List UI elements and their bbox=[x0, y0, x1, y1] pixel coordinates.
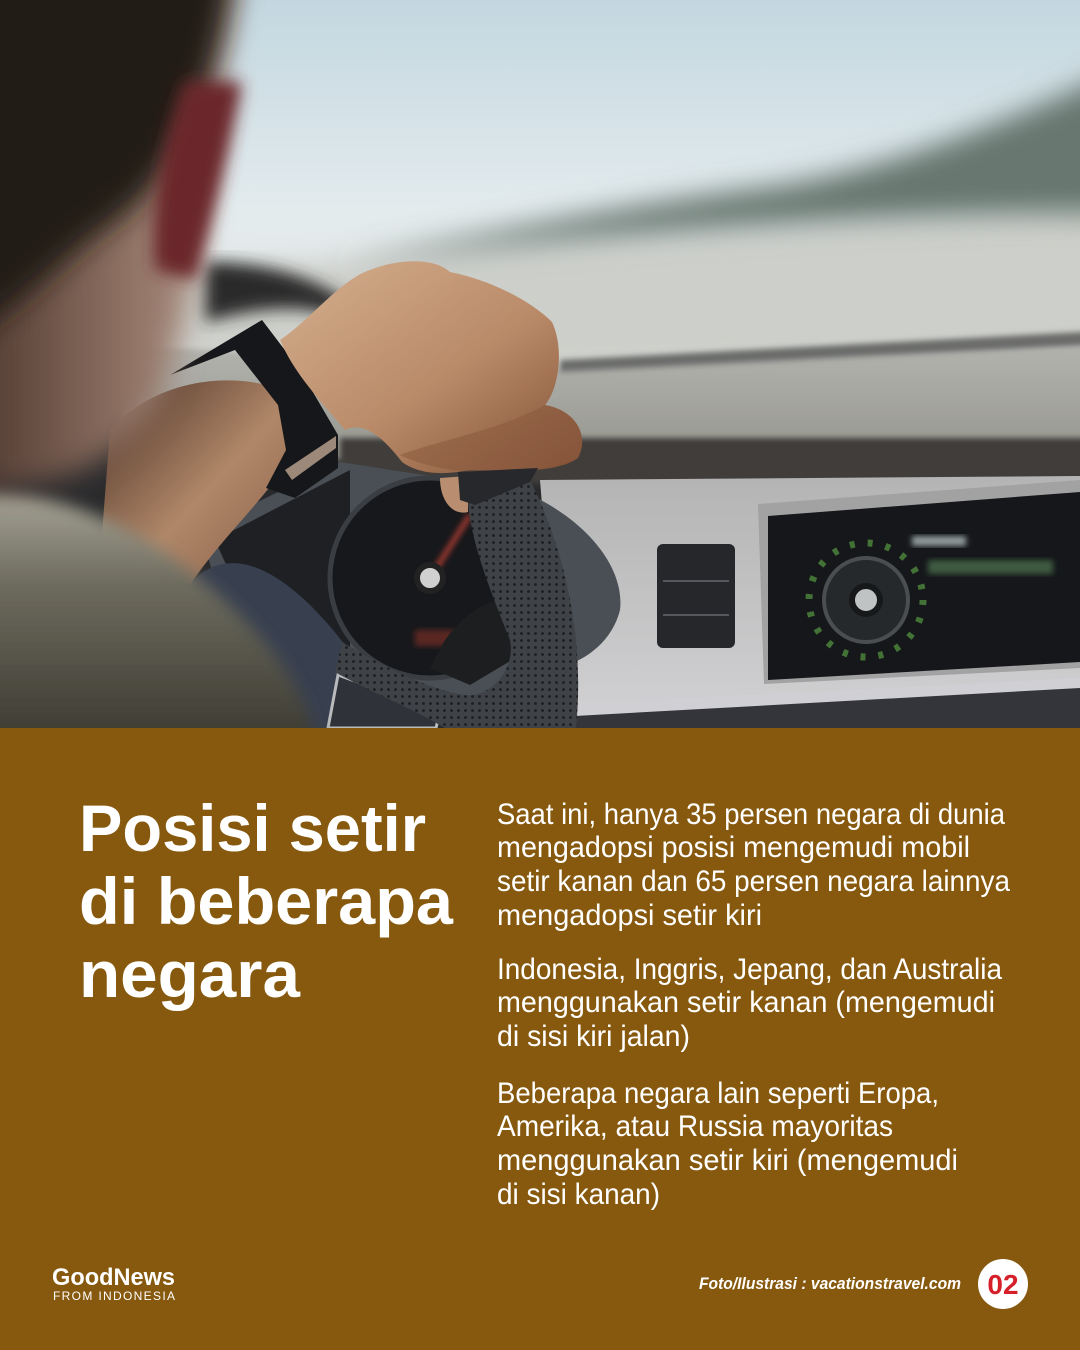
page number badge bbox=[978, 1259, 1028, 1309]
driver head bbox=[0, 0, 240, 490]
centre console bbox=[540, 476, 1080, 728]
steering wheel rim top bbox=[205, 262, 345, 322]
text block: left-hand drive countries: menggunakan setir kiri (mengemudi bbox=[497, 1144, 958, 1177]
hand on wheel bbox=[280, 261, 582, 473]
infotainment screen bbox=[758, 480, 1080, 684]
logo: GoodNews from Indonesia bbox=[52, 1264, 175, 1303]
thumb bbox=[440, 476, 468, 513]
dashboard hood band bbox=[338, 434, 1080, 484]
button panel bbox=[657, 544, 735, 648]
text block: right-hand drive countries: Indonesia, Inggris, Jepang, dan Australia bbox=[497, 953, 1002, 986]
title: di beberapa bbox=[79, 864, 454, 938]
shirt shoulder bbox=[0, 484, 318, 728]
text block: right-hand drive countries bbox=[497, 953, 1002, 1053]
steering wheel perforated rim bbox=[335, 480, 578, 728]
text block: left-hand drive countries: Amerika, atau Russia mayoritas bbox=[497, 1110, 893, 1143]
text block: right-hand drive countries: di sisi kiri jalan) bbox=[497, 1020, 690, 1053]
text block: left-hand drive countries: Beberapa negara lain seperti Eropa, bbox=[497, 1077, 939, 1110]
control buttons bbox=[328, 675, 440, 728]
text block: global share: mengadopsi setir kiri bbox=[497, 899, 762, 932]
text block: left-hand drive countries: di sisi kanan) bbox=[497, 1178, 660, 1211]
sky bbox=[166, 0, 1080, 371]
text block: global share: Saat ini, hanya 35 persen negara di dunia bbox=[497, 798, 1005, 831]
text block: left-hand drive countries bbox=[497, 1077, 958, 1211]
title bbox=[79, 791, 454, 1011]
speedometer dial bbox=[328, 476, 495, 680]
blurred road bbox=[150, 205, 1080, 375]
text block: global share: mengadopsi posisi mengemudi mobil bbox=[497, 831, 970, 864]
title: Posisi setir bbox=[79, 791, 426, 865]
dashboard top bbox=[120, 345, 1080, 460]
stalk bbox=[440, 629, 511, 685]
wrist watch bbox=[170, 320, 338, 498]
photo credit: Foto/Ilustrasi : vacationstravel.com bbox=[699, 1274, 961, 1293]
driver hair bbox=[0, 0, 235, 340]
logo: GoodNews from Indonesia: FROM INDONESIA bbox=[53, 1289, 175, 1303]
logo: GoodNews from Indonesia: GoodNews bbox=[52, 1264, 175, 1291]
instrument cluster surround bbox=[200, 462, 620, 700]
lower vent trim bbox=[576, 688, 1080, 728]
forearm bbox=[100, 380, 290, 585]
sunglasses arm bbox=[154, 80, 242, 280]
text block: right-hand drive countries: menggunakan setir kanan (mengemudi bbox=[497, 986, 995, 1019]
knuckle shadow bbox=[400, 405, 582, 472]
windscreen edge bbox=[560, 330, 1080, 372]
photo: driver holding steering wheel bbox=[0, 0, 1080, 760]
cluster dark left bbox=[218, 470, 350, 647]
page number badge: 02 bbox=[987, 1269, 1019, 1300]
title: negara bbox=[79, 937, 301, 1011]
wheel top grip bbox=[458, 468, 538, 505]
blurred hills bbox=[340, 60, 1080, 262]
text block: global share: setir kanan dan 65 persen negara lainnya bbox=[497, 865, 1010, 898]
text block: global share bbox=[497, 798, 1010, 932]
steering wheel hub bbox=[185, 563, 345, 728]
